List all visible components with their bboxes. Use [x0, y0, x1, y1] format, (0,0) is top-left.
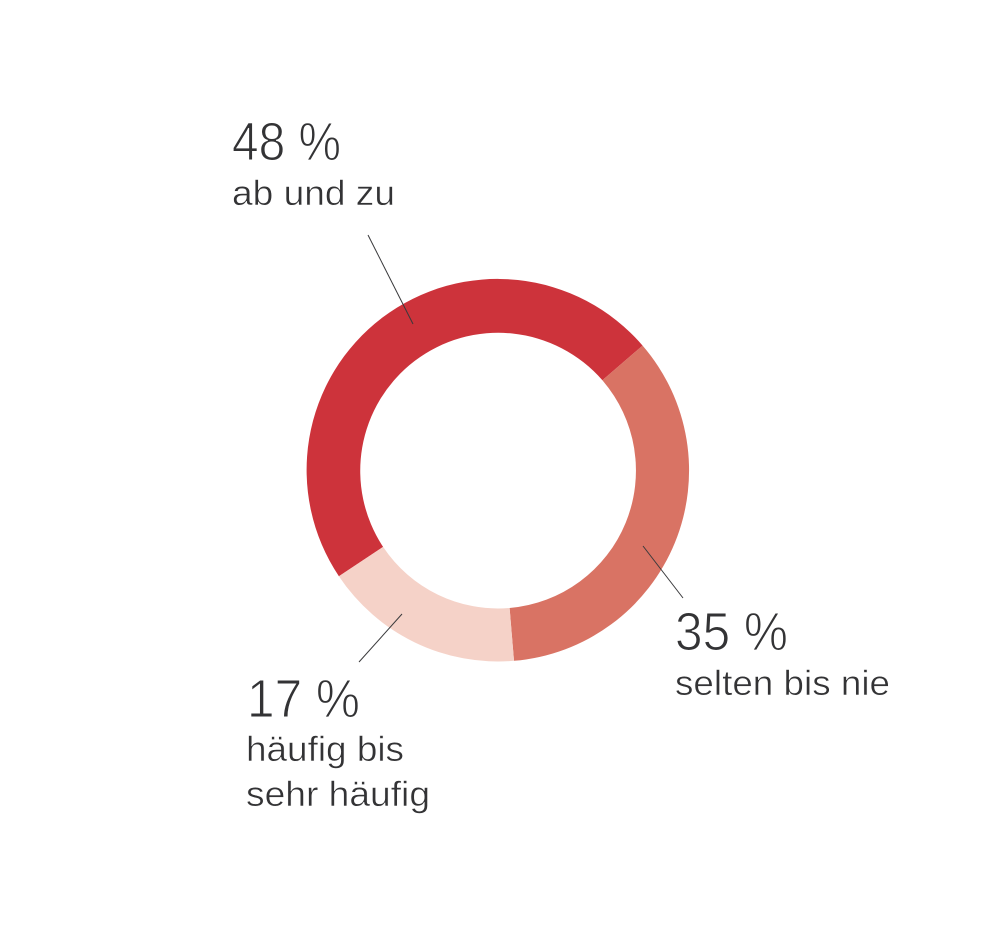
label: 35 % selten bis nie: selten bis nie [675, 664, 890, 703]
label: 17 % häufig bis sehr häufig [246, 669, 430, 814]
segment: 17 % häufig bis sehr häufig [339, 547, 514, 661]
label: 48 % ab und zu [232, 112, 395, 213]
label: 35 % selten bis nie [675, 602, 890, 703]
segment: 48 % ab und zu [307, 279, 643, 576]
label: 48 % ab und zu: 48 % [232, 112, 341, 172]
leader line: 17 % [359, 614, 402, 662]
leader line: 35 % [643, 546, 683, 598]
label: 17 % häufig bis sehr häufig: häufig bis [246, 730, 404, 769]
donut chart [307, 279, 689, 661]
label: 17 % häufig bis sehr häufig: sehr häufig [246, 775, 430, 814]
label: 48 % ab und zu: ab und zu [232, 174, 395, 213]
label: 17 % häufig bis sehr häufig: 17 % [247, 669, 360, 729]
leader line: 48 % [368, 235, 413, 324]
segment: 35 % selten bis nie [510, 346, 689, 661]
label: 35 % selten bis nie: 35 % [675, 602, 788, 662]
